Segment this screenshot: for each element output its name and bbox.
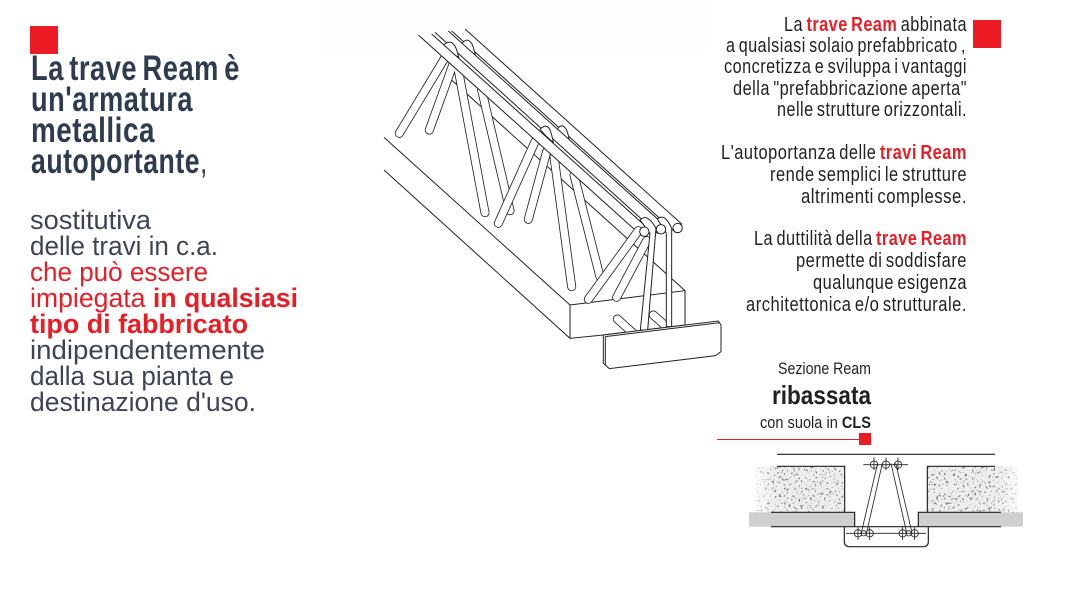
front longitudinal bar — [418, 34, 648, 235]
beam body — [384, 79, 685, 338]
text block: paragraph 2 — [721, 142, 967, 208]
text block: paragraph 3: qualunque esigenza — [813, 272, 967, 294]
heading: La trave Ream: metallica — [31, 111, 155, 150]
heading: La trave Ream — [31, 49, 240, 181]
rear truss loops — [462, 40, 569, 141]
text block: paragraph 3 — [746, 228, 967, 316]
stirrups and bars — [846, 457, 926, 540]
heading: La trave Ream: La trave Ream è — [31, 49, 240, 88]
text block: paragraph 2: rende semplici le strutture — [770, 164, 967, 186]
middle longitudinal bar — [435, 31, 665, 233]
section diagram — [749, 454, 1023, 547]
text block: paragraph 3: La duttilità della trave Ream — [754, 228, 967, 250]
text block: paragraph 1: della "prefabbricazione aperta" — [733, 78, 967, 100]
end diagonals — [588, 231, 647, 299]
text block: paragraph 2: L'autoportanza delle travi Ream — [721, 142, 967, 164]
heading: La trave Ream: un'armatura — [31, 80, 193, 119]
text block: paragraph 1: a qualsiasi solaio prefabbricato , — [726, 35, 966, 57]
back longitudinal bar — [452, 29, 682, 232]
text block: body description: destinazione d'uso. — [30, 387, 256, 417]
text block: body description: impiegata in qualsiasi — [30, 283, 298, 313]
red leader line with square — [717, 433, 871, 445]
text block: paragraph 2: altrimenti complesse. — [801, 186, 967, 208]
heading: La trave Ream: autoportante, — [31, 142, 208, 181]
truss diagonals, second set — [498, 142, 600, 287]
concrete blocks — [755, 466, 1018, 512]
text block: paragraph 1: concretizza e sviluppa i vantaggi — [724, 56, 967, 78]
text block: paragraph 1: La trave Ream abbinata — [784, 14, 967, 36]
icon: red square left — [30, 26, 58, 54]
front truss loops — [443, 42, 553, 143]
text block: paragraph 1: nelle strutture orizzontali. — [777, 99, 967, 121]
grey slab soles — [749, 512, 1023, 527]
section title: Sezione Ream ribassata — [760, 359, 871, 432]
text block: paragraph 1 — [724, 14, 967, 121]
bottom plate — [603, 321, 721, 369]
text block: paragraph 3: architettonica e/o strutturale. — [746, 294, 967, 316]
truss diagonals, first set — [399, 55, 510, 213]
text block: body description — [30, 205, 298, 417]
text block: body description: indipendentemente — [30, 335, 265, 365]
text block: body description: delle travi in c.a. — [30, 231, 218, 261]
text block: body description: sostitutiva — [30, 205, 152, 235]
illustration: Ream truss beam — [384, 29, 721, 369]
text block: body description: dalla sua pianta e — [30, 361, 234, 391]
section title: Sezione Ream ribassata: con suola in CLS — [760, 413, 871, 432]
text block: body description: che può essere — [30, 257, 208, 287]
end verticals and loops — [640, 217, 682, 330]
section title: Sezione Ream ribassata: ribassata — [772, 380, 871, 410]
icon: red square right — [973, 20, 1001, 48]
text block: body description: tipo di fabbricato — [30, 309, 248, 339]
section title: Sezione Ream ribassata: Sezione Ream — [778, 359, 871, 378]
text block: paragraph 3: permette di soddisfare — [796, 250, 967, 272]
short bars at bottom — [617, 315, 668, 333]
section outlines — [771, 454, 1001, 547]
